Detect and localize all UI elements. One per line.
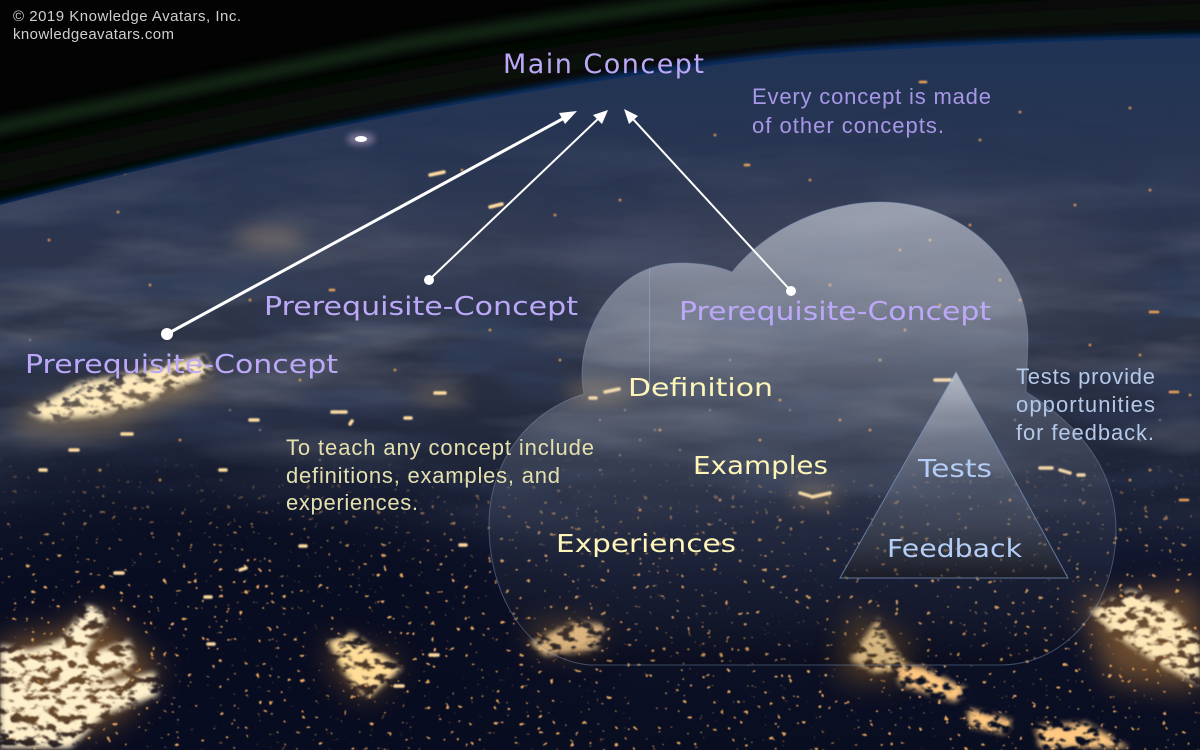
arrow: left prerequisite to main concept bbox=[161, 111, 577, 340]
label: tests: Tests bbox=[917, 454, 992, 483]
note: tests provide feedback: for feedback. bbox=[1016, 420, 1154, 445]
heading: main concept: Main Concept bbox=[503, 49, 704, 80]
label: prerequisite concept, right: Prerequisite-Concept bbox=[679, 297, 991, 327]
divider in cloud bbox=[648, 268, 650, 386]
label: prerequisite concept, middle: Prerequisite-Concept bbox=[264, 292, 578, 322]
note: how to teach bbox=[286, 435, 594, 515]
label: examples: Examples bbox=[693, 451, 828, 480]
cloud shape bbox=[489, 202, 1116, 665]
note: every concept: Every concept is made bbox=[752, 84, 991, 109]
triangle bbox=[840, 372, 1068, 578]
flash of lightning bbox=[347, 133, 375, 145]
note: tests provide feedback: Tests provide bbox=[1016, 364, 1155, 389]
note: tests provide feedback: opportunities bbox=[1016, 392, 1155, 417]
arrow: middle prerequisite to main concept bbox=[424, 110, 608, 285]
note: tests provide feedback bbox=[1016, 364, 1155, 445]
label: feedback: Feedback bbox=[887, 534, 1023, 563]
city lights bbox=[30, 82, 1190, 686]
copyright: knowledgeavatars.com bbox=[13, 26, 174, 43]
copyright: © 2019 Knowledge Avatars, Inc. bbox=[13, 8, 241, 25]
label: experiences: Experiences bbox=[556, 529, 736, 558]
label: definition: Definition bbox=[628, 373, 773, 402]
arrow: right prerequisite to main concept bbox=[624, 109, 796, 296]
bright city masses, speckled bbox=[0, 355, 1200, 748]
label: prerequisite concept, left: Prerequisite-Concept bbox=[25, 350, 338, 380]
note: every concept: of other concepts. bbox=[752, 113, 944, 138]
note: how to teach: experiences. bbox=[286, 490, 418, 515]
note: every concept bbox=[752, 84, 991, 138]
note: how to teach: definitions, examples, and bbox=[286, 463, 560, 488]
copyright bbox=[13, 8, 241, 43]
scattered speckle lights bbox=[0, 456, 1200, 750]
city glow blobs bbox=[0, 360, 1200, 740]
note: how to teach: To teach any concept include bbox=[286, 435, 594, 460]
